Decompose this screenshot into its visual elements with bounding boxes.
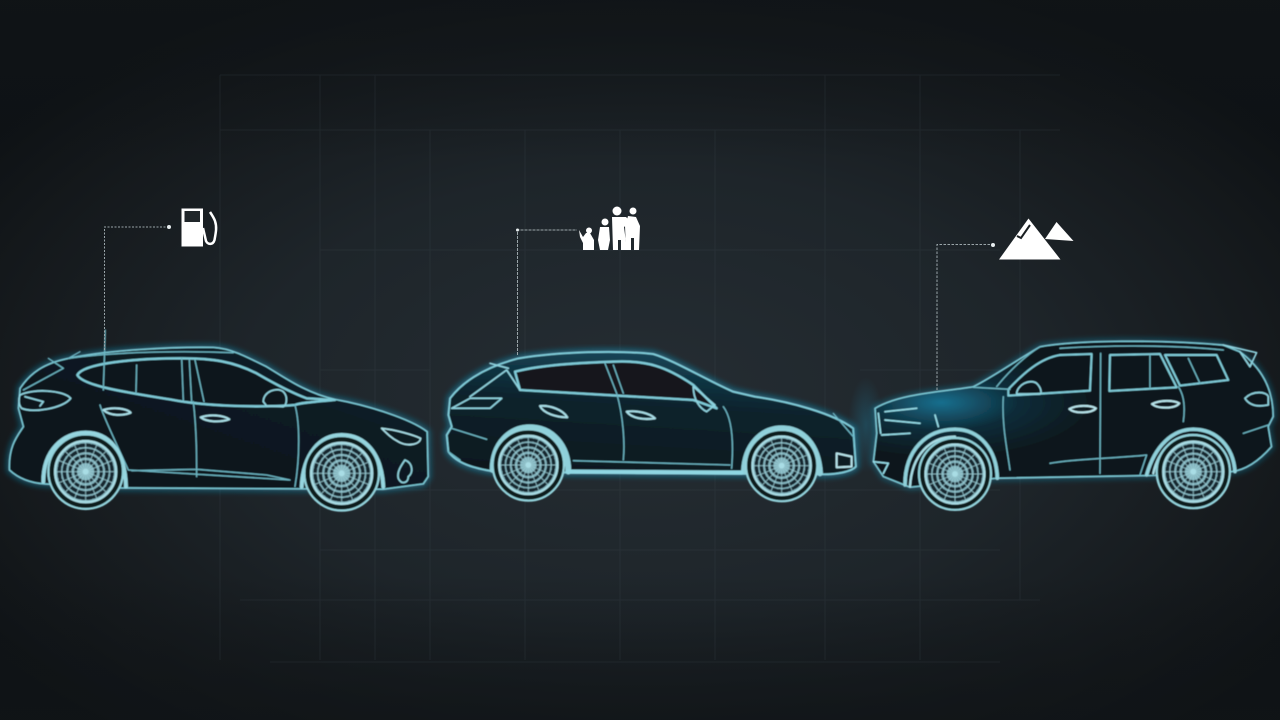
car 3 rear-side wheel trim bbox=[910, 435, 1193, 487]
car 1 glow bbox=[9, 347, 428, 489]
car 1 fog lamp bbox=[398, 460, 412, 483]
leader line: family bbox=[516, 228, 577, 355]
car 1 door handles bbox=[103, 408, 229, 421]
leader line: mountain bbox=[937, 243, 995, 390]
car 2: family hatchback bbox=[447, 352, 856, 501]
car 1 body bbox=[9, 347, 428, 489]
icon: mountains bbox=[999, 218, 1074, 260]
car 3 door handles bbox=[1069, 401, 1179, 412]
car 3 mirror bbox=[1017, 382, 1041, 394]
car 3 front wheel bbox=[919, 438, 991, 510]
leader line: fuel bbox=[104, 225, 171, 350]
car 2 detail lines bbox=[448, 363, 853, 468]
car 1 tail light bbox=[19, 391, 71, 410]
car 3 spoiler bbox=[1223, 345, 1257, 367]
car 3: off-road SUV bbox=[873, 341, 1273, 510]
car 1: fuel-efficient hatchback bbox=[9, 330, 428, 511]
car 1 detail lines bbox=[23, 330, 299, 487]
car 3 detail lines bbox=[973, 346, 1268, 475]
car 3 glow bbox=[873, 341, 1273, 487]
car 3 body bbox=[873, 341, 1273, 487]
car 3 tail light bbox=[1245, 392, 1268, 406]
car 2 side windows bbox=[515, 361, 717, 408]
car 2 front lamp bbox=[837, 453, 852, 467]
car 2 mirror bbox=[693, 387, 715, 412]
car 1 mirror bbox=[263, 390, 286, 407]
car 1 wheel arches bbox=[43, 433, 383, 487]
car 1 front wheel bbox=[304, 436, 379, 511]
car 2 wheel arches bbox=[493, 427, 820, 473]
car 1 rear wheel bbox=[48, 434, 123, 509]
front glow between car 2 and car 3 bbox=[848, 377, 884, 473]
car 2 glow bbox=[447, 352, 856, 474]
car 2 rear glass and tail light bbox=[452, 363, 520, 408]
car 3 wheel arches bbox=[905, 429, 1235, 485]
icon: family group bbox=[579, 206, 640, 250]
car 3 windows bbox=[1008, 354, 1228, 396]
car 2 door handles bbox=[540, 406, 655, 419]
car 2 body bbox=[447, 352, 856, 474]
car 2 sill bbox=[567, 465, 742, 479]
icon: fuel pump bbox=[182, 208, 216, 246]
car 1 side windows bbox=[77, 358, 335, 406]
car 3 headlight and grille bbox=[873, 408, 938, 473]
car 2 front wheel bbox=[746, 430, 817, 501]
car 2 rear wheel bbox=[493, 429, 564, 501]
car 1 headlight bbox=[382, 428, 421, 445]
car 3 rear wheel bbox=[1157, 435, 1230, 508]
